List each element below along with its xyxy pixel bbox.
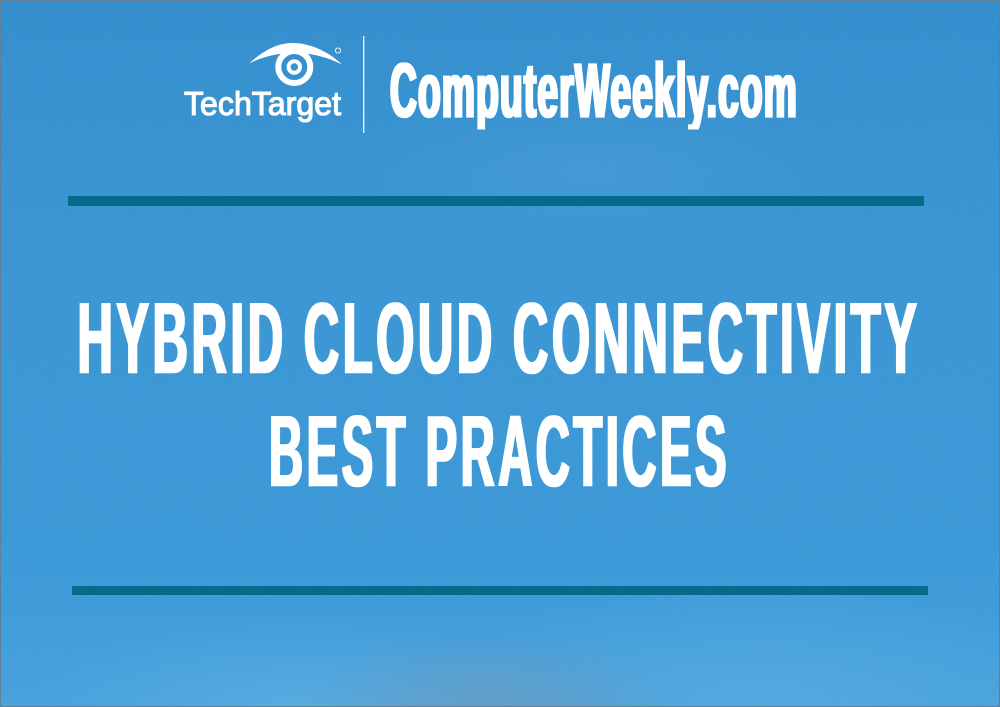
bottom rule (72, 586, 928, 595)
icon: TechTarget eye (249, 43, 342, 83)
top rule (68, 196, 924, 206)
logo: TechTarget (184, 43, 342, 122)
logo divider (363, 36, 364, 133)
title (78, 283, 920, 508)
wordmark: TechTarget: TechTarget (184, 85, 341, 122)
